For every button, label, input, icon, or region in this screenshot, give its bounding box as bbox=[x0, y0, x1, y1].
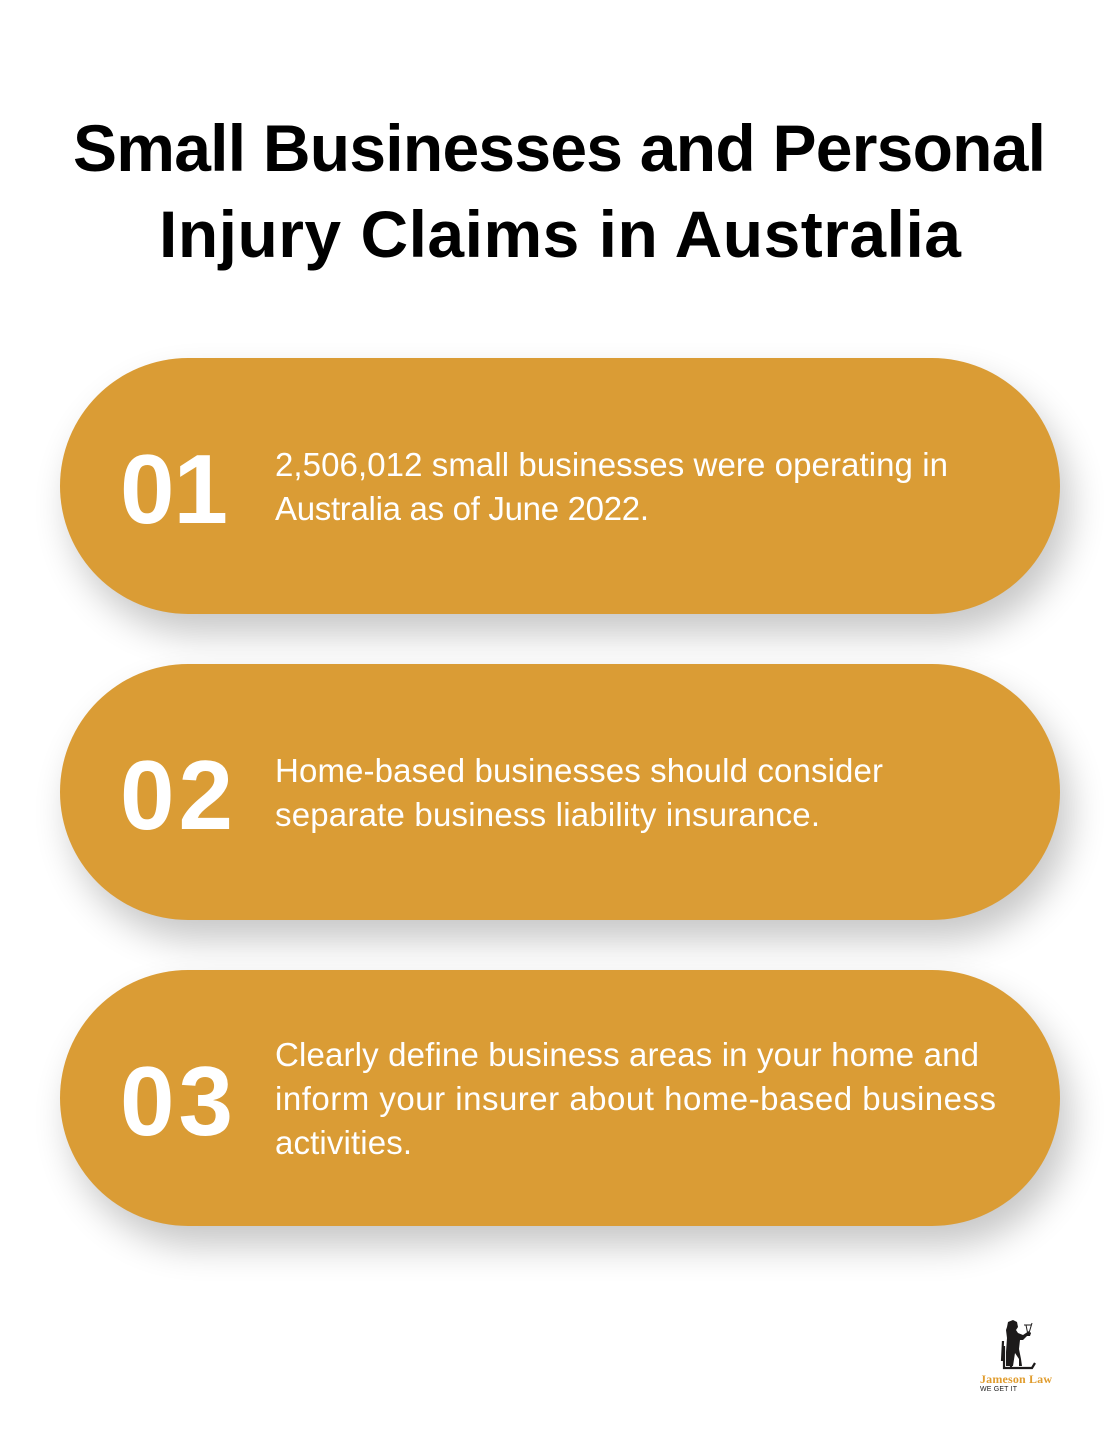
title: Small Businesses and Personal bbox=[73, 111, 1046, 185]
number 02: 02 bbox=[120, 740, 233, 850]
title bbox=[73, 111, 1046, 271]
text: small business count bbox=[275, 446, 948, 527]
logo wordmark: Jameson Law bbox=[980, 1372, 1052, 1386]
title: Injury Claims in Australia bbox=[159, 197, 962, 271]
logo: Jameson Law bbox=[980, 1320, 1052, 1393]
text: liability insurance bbox=[275, 752, 883, 833]
text: define business areas: activities. bbox=[275, 1124, 412, 1161]
text: define business areas: Clearly define business areas in your home and bbox=[275, 1036, 979, 1073]
text: small business count: Australia as of June 2022. bbox=[275, 490, 649, 527]
number 01: 01 bbox=[120, 434, 228, 544]
text: small business count: 2,506,012 small businesses were operating in bbox=[275, 446, 948, 483]
text: liability insurance: Home-based businesses should consider bbox=[275, 752, 883, 789]
logo tagline: WE GET IT bbox=[980, 1386, 1018, 1393]
panel: statistic 01 bbox=[60, 358, 1070, 634]
icon: lady justice bbox=[1002, 1320, 1035, 1368]
panel: statistic 03 bbox=[60, 970, 1070, 1246]
text: define business areas: inform your insurer about home-based business bbox=[275, 1080, 996, 1117]
text: define business areas bbox=[275, 1036, 996, 1161]
number 03: 03 bbox=[120, 1046, 233, 1156]
panel: statistic 02 bbox=[60, 664, 1070, 940]
text: liability insurance: separate business liability insurance. bbox=[275, 796, 820, 833]
